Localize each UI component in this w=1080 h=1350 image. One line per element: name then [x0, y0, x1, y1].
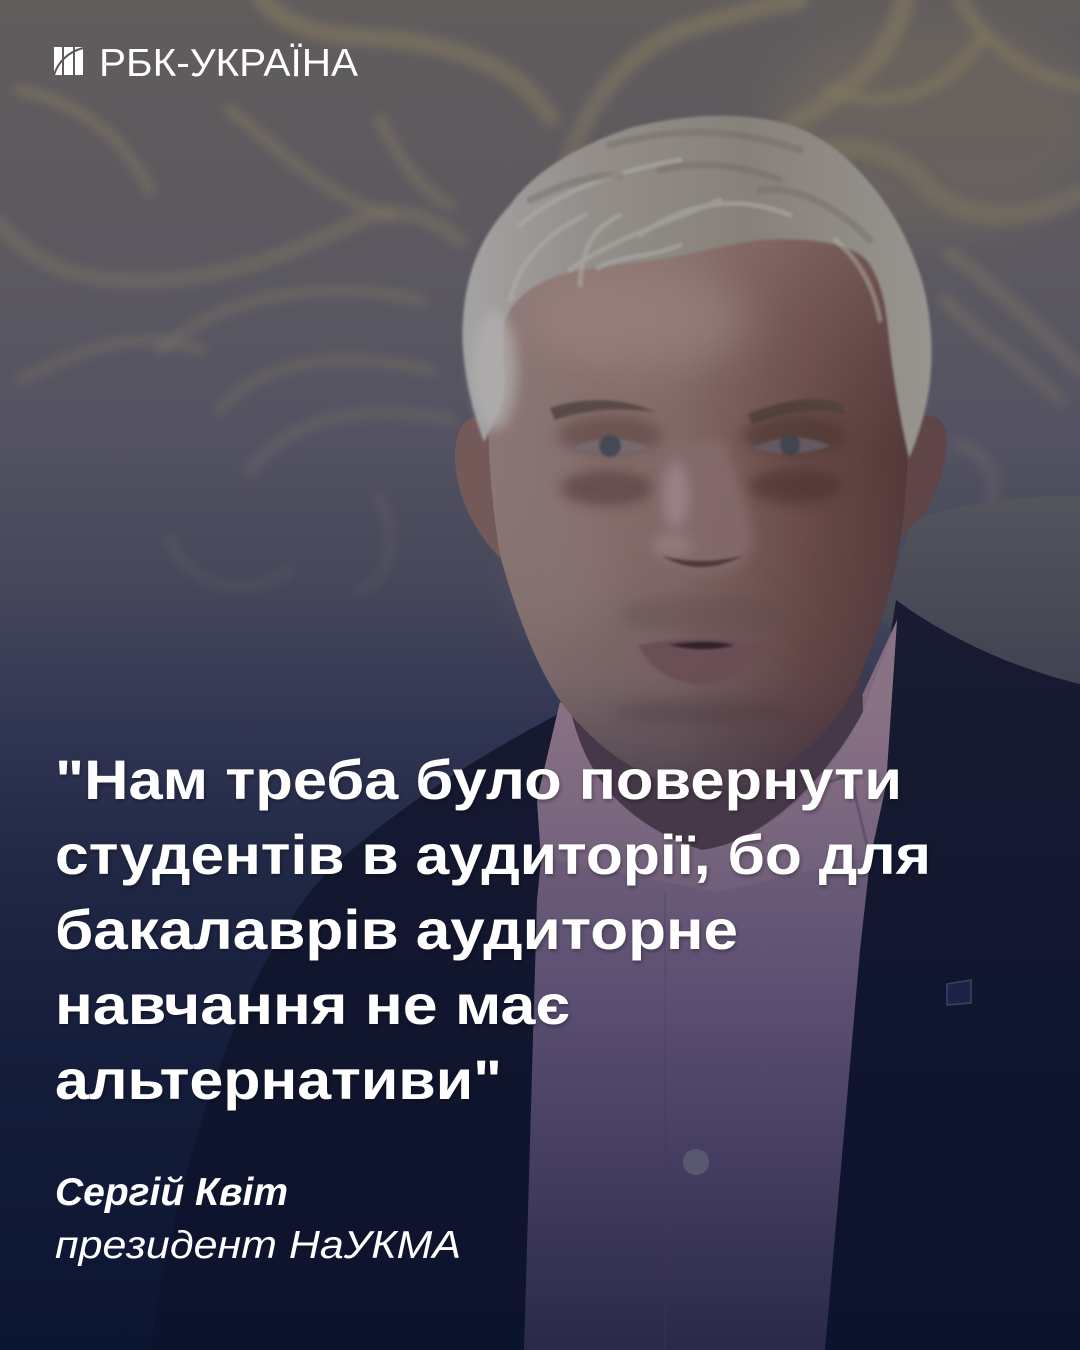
- chin shadow: [615, 700, 795, 724]
- shirt: [524, 620, 897, 1350]
- mouth: [638, 638, 765, 684]
- right ear: [895, 416, 947, 540]
- quote: альтернативи": [55, 1048, 502, 1111]
- moustache shading: [620, 595, 790, 635]
- jacket: [150, 600, 1080, 1350]
- forehead highlight: [530, 270, 750, 370]
- left cheek light: [520, 490, 610, 630]
- logo icon: [54, 47, 83, 75]
- armchair: [880, 496, 1080, 710]
- hair tufts: [510, 160, 880, 320]
- neck shadow: [572, 600, 863, 852]
- quote: бакалаврів аудиторне: [55, 898, 738, 961]
- eye bags: [561, 470, 653, 506]
- quote: "Нам треба було повернути: [55, 748, 902, 811]
- quote: навчання не має: [55, 973, 570, 1036]
- logo text: РБК-УКРАЇНА: [99, 42, 358, 85]
- shirt button: [683, 1149, 709, 1175]
- left temple light: [473, 310, 517, 430]
- quote: студентів в аудиторії, бо для: [55, 823, 931, 886]
- lapel pin: [947, 980, 971, 1005]
- attribution: [55, 1171, 461, 1267]
- portrait of Serhii Kvit: [150, 116, 1080, 1350]
- right eyebrow: [748, 399, 846, 424]
- hair: [462, 116, 932, 458]
- right eye: [752, 435, 830, 455]
- placket: [664, 892, 666, 1350]
- collar fold: [820, 775, 870, 857]
- logo: РБК-Україна: [54, 42, 358, 85]
- left eyebrow: [550, 400, 655, 420]
- left ear: [455, 417, 505, 558]
- quote: [55, 748, 931, 1111]
- face: [488, 226, 908, 790]
- left eye socket shadow: [558, 415, 662, 455]
- attribution: Сергій Квіт: [55, 1171, 288, 1214]
- attribution: президент НаУКМА: [55, 1224, 461, 1267]
- collar: [537, 702, 717, 892]
- left eye: [570, 435, 652, 457]
- right eye socket shadow: [743, 415, 847, 455]
- nose: [650, 440, 752, 572]
